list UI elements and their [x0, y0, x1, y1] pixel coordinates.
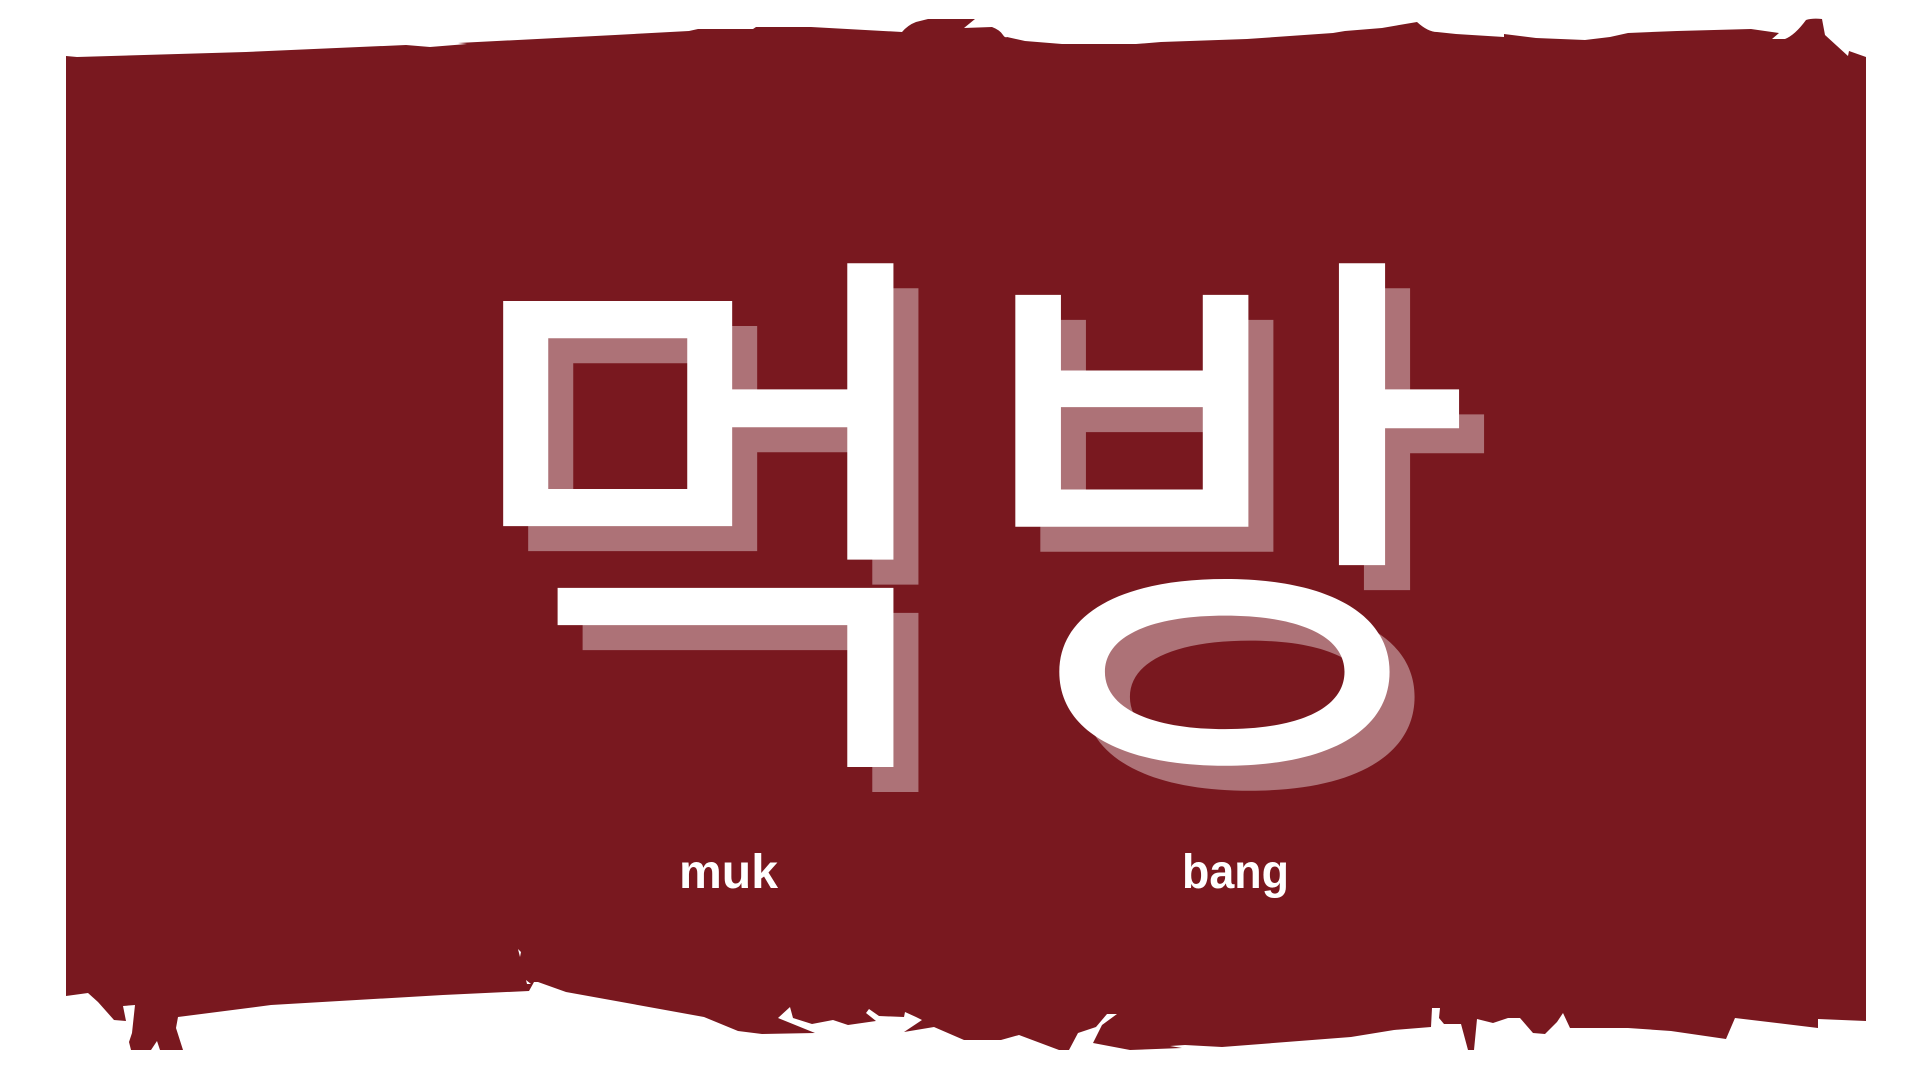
title: Korean word mukbang: 먹: [452, 79, 964, 884]
title: Korean word mukbang: 방: [967, 79, 1479, 884]
label: muk: muk: [679, 846, 778, 899]
shadow of Korean title: 먹: [477, 104, 989, 909]
shadow of Korean title: 방: [992, 104, 1504, 909]
label: bang: bang: [1182, 846, 1289, 899]
shadow of Korean title: [477, 104, 1504, 909]
title: Korean word mukbang: [452, 79, 1479, 884]
